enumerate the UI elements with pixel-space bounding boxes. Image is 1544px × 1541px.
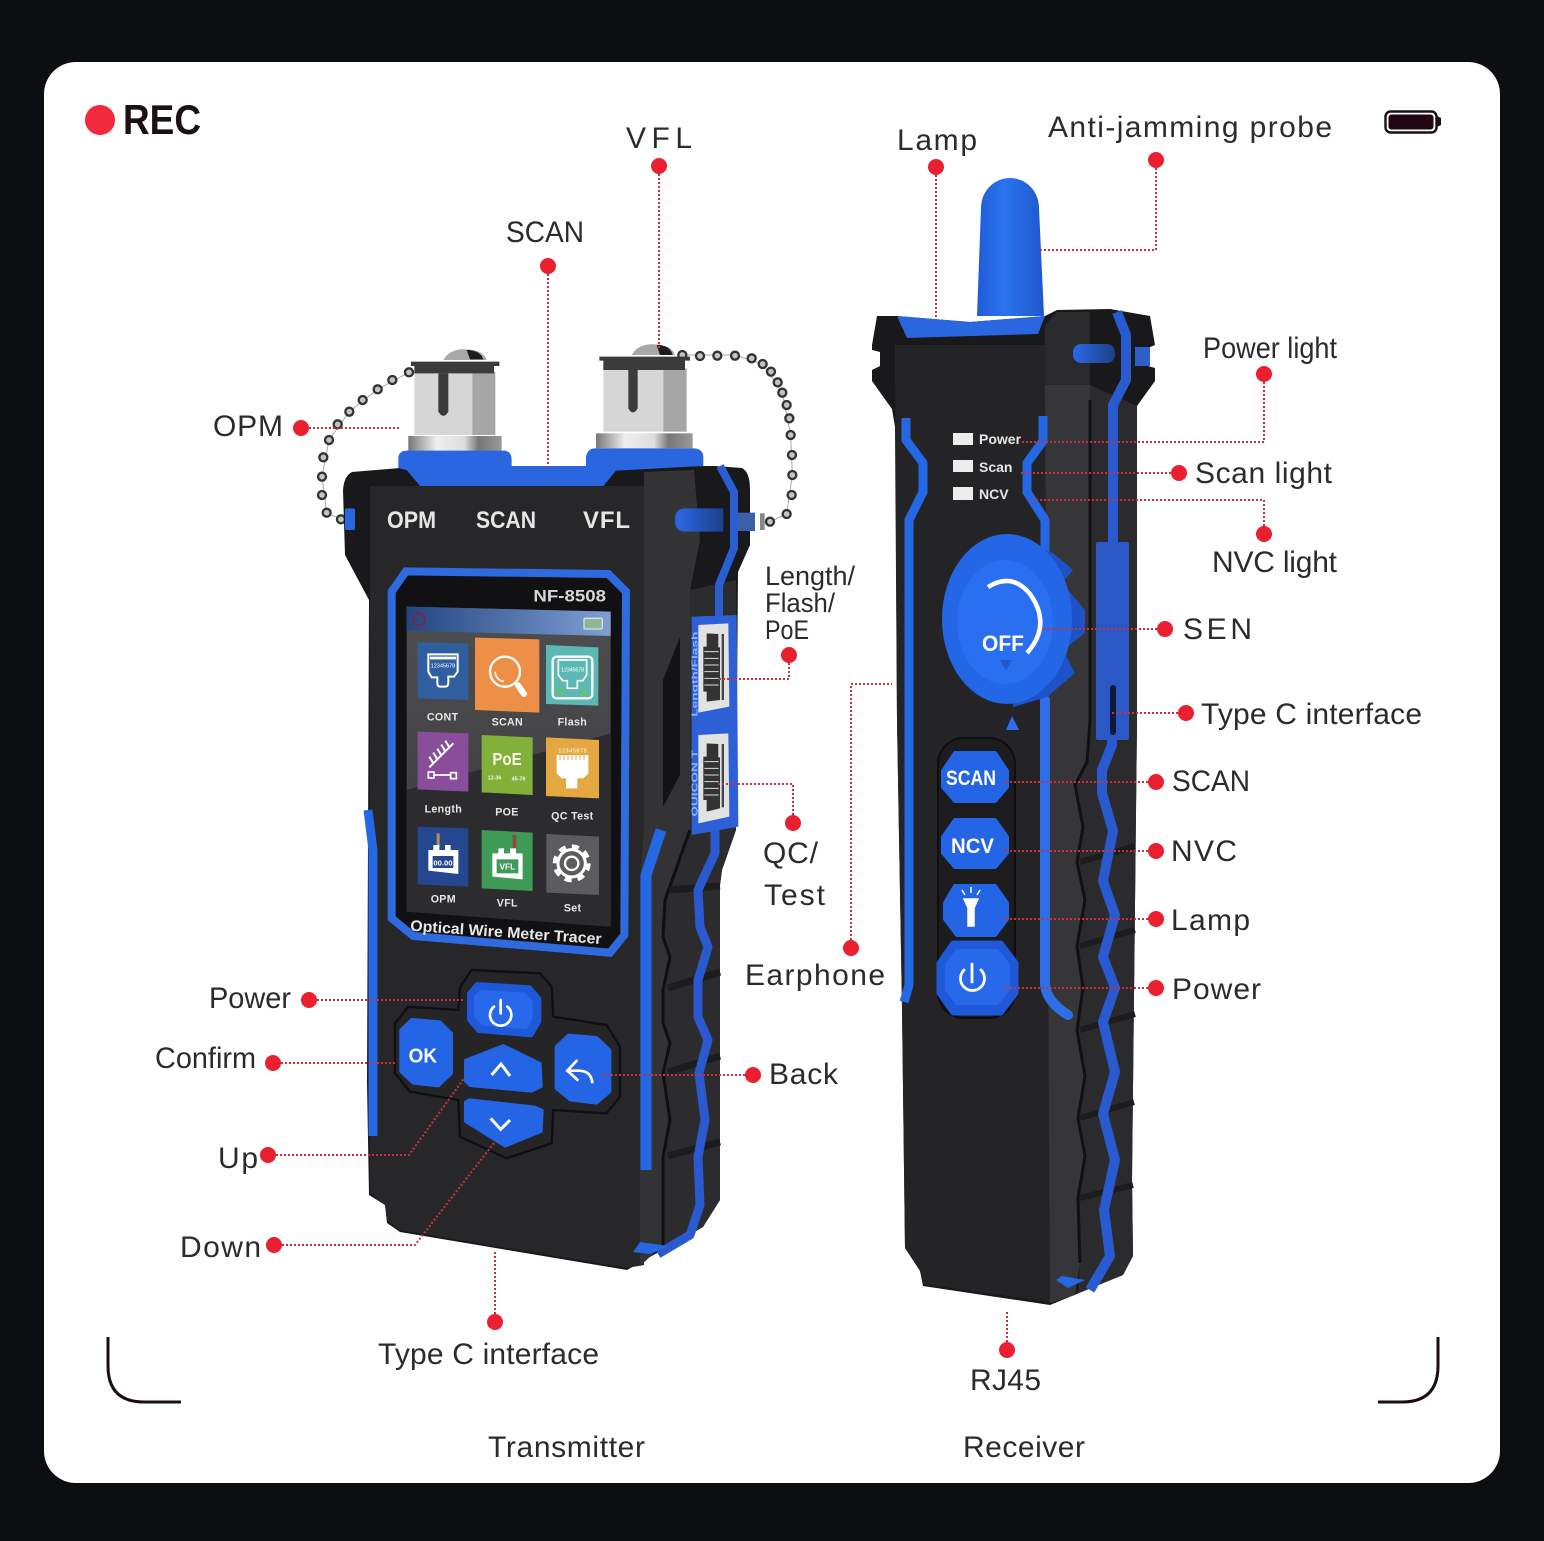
screen lower shade xyxy=(407,733,611,927)
callout: Lamp top: Lamp xyxy=(897,124,977,157)
callout: Down xyxy=(180,1143,494,1264)
screen header xyxy=(407,607,611,636)
callout: Lamp top xyxy=(897,124,977,318)
callout: Lamp right: Lamp xyxy=(1171,904,1250,937)
callout: OPM xyxy=(213,410,400,443)
callout: SCAN top xyxy=(506,216,584,470)
indicator lights xyxy=(953,431,1022,502)
product name: Optical Wire Meter Tracer xyxy=(410,918,602,948)
callout: NVC right xyxy=(1003,835,1237,868)
tile: POE xyxy=(482,735,533,819)
corner bracket left xyxy=(108,1337,181,1402)
side ridges xyxy=(1080,846,1135,1198)
corner bracket right xyxy=(1378,1337,1438,1402)
callout: NVC light xyxy=(1030,500,1338,579)
sensitivity knob xyxy=(942,534,1085,707)
button: NCV xyxy=(943,820,1007,867)
tile: QC Test xyxy=(546,737,599,822)
callout: Earphone xyxy=(745,684,892,992)
ball chain and adapters xyxy=(318,344,796,526)
callout: Up xyxy=(218,1077,465,1175)
tile: POE: POE xyxy=(495,807,519,819)
blue trim lines xyxy=(368,466,734,1254)
button: power xyxy=(939,943,1016,1013)
button: SCAN: SCAN xyxy=(946,767,996,790)
front face xyxy=(895,345,1050,1302)
callout: Power light: Power light xyxy=(1203,332,1338,365)
right tab xyxy=(1135,347,1150,366)
sensitivity knob: OFF xyxy=(982,631,1024,656)
tile: CONT: 12345678 xyxy=(431,663,455,669)
wave edge line xyxy=(663,830,690,1245)
REC indicator xyxy=(85,96,201,143)
callout: RJ45 xyxy=(970,1312,1041,1397)
side panel xyxy=(663,580,736,1250)
wave edge line xyxy=(1075,400,1090,1263)
icon: timer xyxy=(413,613,425,625)
clip loop xyxy=(1073,344,1115,363)
tile: POE: 45-78 xyxy=(512,777,525,783)
transmitter body xyxy=(343,466,750,1270)
callout: Power right: Power xyxy=(1172,973,1261,1006)
callout: Back: Back xyxy=(769,1058,839,1091)
tile: VFL: VFL xyxy=(497,898,518,910)
tile: POE: PoE xyxy=(492,749,522,769)
callout: NVC light: NVC light xyxy=(1212,546,1338,579)
bottom port xyxy=(633,1242,668,1254)
button: lamp xyxy=(945,886,1007,935)
callout: QC Test: Test xyxy=(764,879,826,912)
tile: Length: Length xyxy=(425,803,462,815)
callout: Power left xyxy=(209,982,465,1015)
side RJ45 ports: QUICON T xyxy=(690,750,699,817)
callout: QC Test: QC/ xyxy=(763,837,819,870)
callout: Down: Down xyxy=(180,1231,261,1264)
callout: Anti-jamming probe xyxy=(1040,111,1332,250)
button: back xyxy=(556,1035,610,1103)
port labels: OPM xyxy=(387,507,436,534)
callout: Confirm xyxy=(155,1042,397,1075)
indicator lights: NCV xyxy=(979,486,1009,502)
side strip xyxy=(640,470,700,1266)
receiver device xyxy=(872,178,1155,1305)
display module xyxy=(392,571,626,953)
side cover xyxy=(1096,542,1129,740)
callout: QC Test xyxy=(718,784,826,912)
button: NCV: NCV xyxy=(951,835,994,858)
button: SCAN xyxy=(943,753,1007,801)
callout: SCAN right: SCAN xyxy=(1172,765,1250,798)
type c slot xyxy=(1110,685,1116,735)
tile: QC Test: QC Test xyxy=(551,810,594,822)
callout: Scan light: Scan light xyxy=(1195,457,1333,490)
indicator lights: Scan xyxy=(979,459,1012,475)
button group xyxy=(938,738,1016,1018)
side panel xyxy=(1075,385,1137,1293)
side strip xyxy=(1045,385,1090,1303)
callout: SCAN right xyxy=(1003,765,1250,798)
callout: OPM: OPM xyxy=(213,410,283,443)
callout: RJ45: RJ45 xyxy=(970,1364,1041,1397)
callout: Power right xyxy=(1003,973,1261,1006)
tile: SCAN xyxy=(475,638,539,729)
callout: Earphone: Earphone xyxy=(745,959,885,992)
port labels: V F L xyxy=(583,507,630,534)
upper side shading xyxy=(1045,312,1090,385)
callout: Length/Flash/PoE xyxy=(718,561,855,679)
icon: battery xyxy=(1386,112,1441,132)
bottom port xyxy=(1056,1276,1085,1288)
callout: Up: Up xyxy=(218,1142,258,1175)
tile: Set: Set xyxy=(564,903,582,915)
callout: Anti-jamming probe: Anti-jamming probe xyxy=(1048,111,1332,144)
button: power xyxy=(468,983,540,1036)
tile: VFL xyxy=(482,830,533,910)
callout: SEN: SEN xyxy=(1183,613,1252,646)
button: up xyxy=(465,1045,542,1092)
callout: Scan light xyxy=(1020,457,1333,490)
callout: Type C interface bottom: Type C interface xyxy=(378,1338,599,1371)
port labels xyxy=(387,507,630,534)
callout: Power left: Power xyxy=(209,982,291,1015)
callout: Power light xyxy=(1022,332,1338,442)
callout: VFL: VFL xyxy=(626,122,692,155)
button: OK xyxy=(401,1019,452,1086)
pointer triangle xyxy=(1006,716,1019,730)
tile: Flash: 12345678 xyxy=(561,667,584,673)
tile: POE: 12-36 xyxy=(488,775,501,781)
caption: Receiver: Receiver xyxy=(963,1431,1085,1464)
tile: Flash xyxy=(546,645,598,729)
tile: OPM xyxy=(418,827,468,905)
tile: QC Test: 12345678 xyxy=(558,749,587,755)
tile: CONT: CONT xyxy=(427,712,459,724)
callout: Length/Flash/PoE: Length/ xyxy=(765,561,855,591)
tile: SCAN: SCAN xyxy=(492,717,523,729)
blue top band xyxy=(345,466,765,532)
receiver body xyxy=(872,309,1155,1305)
indicator lights: Power xyxy=(979,431,1022,447)
port labels: SCAN xyxy=(476,507,536,534)
callout: VFL xyxy=(626,122,692,348)
REC indicator: REC xyxy=(123,96,201,143)
keypad xyxy=(395,970,620,1158)
tile: CONT xyxy=(418,642,468,724)
callout: Type C interface right: Type C interface xyxy=(1201,698,1422,731)
side ridges xyxy=(668,886,720,1156)
tile: OPM: OPM xyxy=(431,893,456,905)
anti-jamming probe xyxy=(977,178,1044,316)
callout: SCAN top: SCAN xyxy=(506,216,584,249)
callout: Type C interface bottom xyxy=(378,1252,599,1371)
icon: screen battery xyxy=(584,618,602,629)
side RJ45 ports: Length/Flash xyxy=(690,631,699,717)
side slit xyxy=(663,637,680,807)
tile: Length xyxy=(418,732,468,815)
tile: Flash: Flash xyxy=(558,717,587,729)
button: OK: OK xyxy=(409,1045,437,1068)
button: down xyxy=(465,1099,543,1147)
tile: VFL: VFL xyxy=(499,861,515,871)
front face xyxy=(370,486,644,1268)
callout: SEN xyxy=(1042,613,1252,646)
screen xyxy=(407,607,611,927)
callout: Length/Flash/PoE: PoE xyxy=(765,615,809,645)
blue top band xyxy=(897,316,1045,338)
callout: NVC right: NVC xyxy=(1171,835,1237,868)
callout: Length/Flash/PoE: Flash/ xyxy=(765,588,835,618)
caption: Transmitter: Transmitter xyxy=(488,1431,645,1464)
model name: NF-8508 xyxy=(533,587,606,606)
transmitter device xyxy=(318,344,796,1270)
tile: OPM: 00.00 xyxy=(433,859,453,868)
callout: Confirm: Confirm xyxy=(155,1042,256,1075)
side RJ45 ports xyxy=(690,615,738,835)
blue trim lines xyxy=(904,312,1126,1290)
callout: Lamp right xyxy=(1003,904,1250,937)
callout: Back xyxy=(600,1058,839,1091)
tile: Set xyxy=(546,834,599,915)
